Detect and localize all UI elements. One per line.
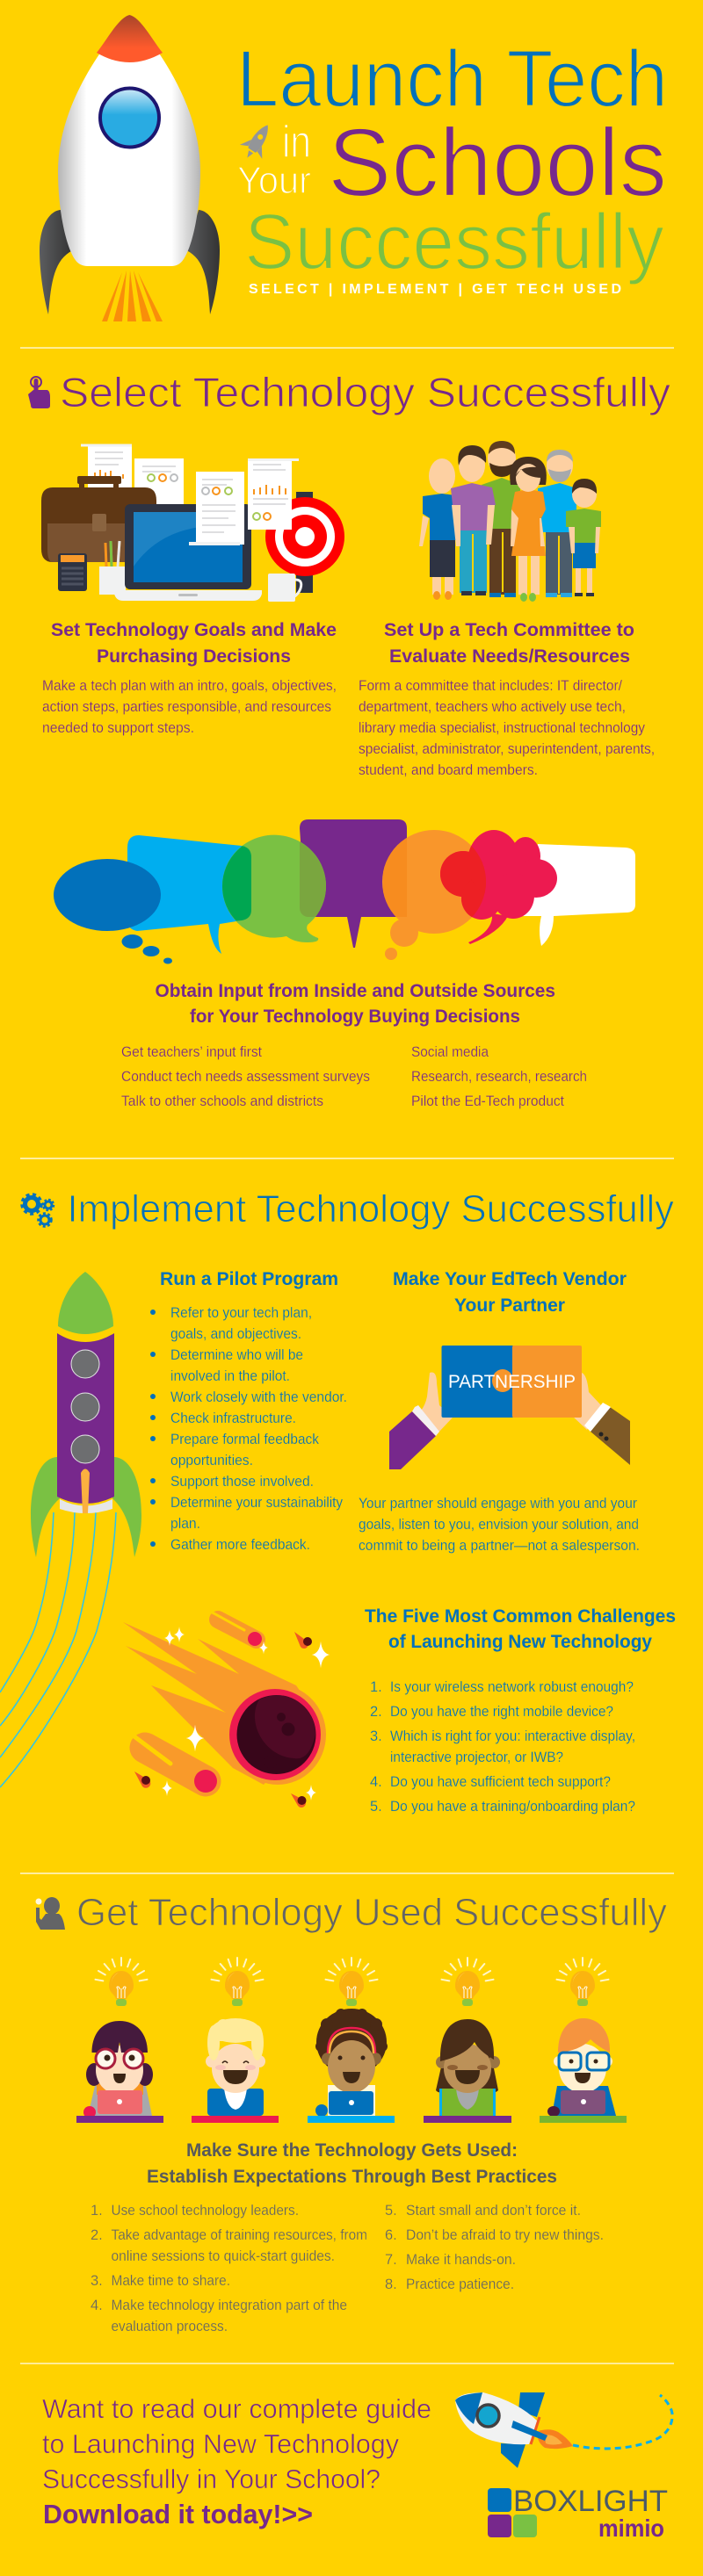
meteor tail [123, 1622, 321, 1785]
heading: of Launching New Technology [388, 1632, 652, 1652]
student 3 [308, 2009, 395, 2123]
logo: boxlight mimio: mimio [598, 2515, 664, 2542]
body text: action steps, parties responsible, and resources [42, 699, 331, 715]
cyan bubble [127, 835, 251, 954]
list [170, 1305, 347, 1553]
paper 3 [189, 472, 244, 545]
person: child, green shirt [566, 479, 601, 596]
numbered list: Which is right for you: interactive display, [390, 1728, 635, 1744]
list: right: Make it hands-on. [406, 2252, 516, 2268]
flame [538, 2429, 573, 2449]
body text: Your partner should engage with you and your [359, 1496, 637, 1512]
heading: Run a Pilot Program [160, 1269, 338, 1289]
calculator [58, 553, 87, 591]
icon: pointing hand [28, 377, 50, 408]
list: left: 1. [91, 2203, 103, 2219]
illustration: small rocket with dashed trail [455, 2392, 672, 2468]
list: right: 6. [385, 2227, 397, 2243]
bulb 1 [95, 1958, 148, 2006]
block: vendor partner [359, 1269, 640, 1554]
list: right column [411, 1044, 587, 1109]
list: left column: Talk to other schools and districts [121, 1093, 323, 1109]
fins [31, 1457, 141, 1557]
list: right: 7. [385, 2252, 397, 2268]
pencil cup [99, 541, 126, 595]
list: goals, and objectives. [170, 1326, 301, 1342]
list: right: Practice patience. [406, 2277, 514, 2292]
section heading: implement: Implement Technology Successfully [67, 1187, 674, 1230]
rocket body [455, 2392, 538, 2444]
list: Support those involved. [170, 1474, 314, 1490]
purple bubble [300, 819, 407, 948]
heading: Make Your EdTech Vendor [393, 1269, 627, 1289]
illustration: pilot rocket with contrails [0, 1272, 141, 1787]
numbered list: interactive projector, or IWB? [390, 1750, 563, 1765]
heading: The Five Most Common Challenges [365, 1606, 676, 1627]
numbered list: 5. [370, 1799, 382, 1815]
illustration: office desk [41, 445, 344, 602]
list: left column [121, 1044, 370, 1109]
body text: department, teachers who actively use tech, [359, 699, 626, 715]
title: Your [237, 159, 311, 202]
person: grey beard man, cyan shirt [538, 450, 576, 597]
nose cone [58, 1272, 113, 1334]
heading [365, 1606, 676, 1652]
person: woman, blue shirt [419, 458, 466, 600]
green bubble [222, 835, 326, 942]
heading: Purchasing Decisions [97, 646, 291, 667]
heading [147, 2140, 557, 2187]
target [265, 497, 344, 576]
illustration: five lightbulbs [95, 1958, 608, 2006]
briefcase [41, 476, 156, 562]
flame stem [81, 1468, 90, 1513]
block: run a pilot [150, 1269, 347, 1553]
list: left: Make time to share. [111, 2273, 230, 2289]
list: right [385, 2203, 604, 2292]
numbered list: Do you have a training/onboarding plan? [390, 1799, 635, 1815]
call to action: Successfully in Your School? [42, 2464, 380, 2494]
block: five challenges [365, 1606, 676, 1815]
student 2 [192, 2018, 279, 2123]
body text [42, 678, 337, 736]
list: right column: Pilot the Ed-Tech product [411, 1093, 564, 1109]
student 1 [76, 2021, 163, 2123]
illustration: five students [76, 2009, 627, 2123]
paper 1 [81, 445, 132, 498]
section heading: get tech used: Get Technology Used Successfully [76, 1891, 667, 1934]
logo: boxlight mimio: BOXLIGHT [513, 2485, 668, 2518]
illustration: partnership hands: PARTNERSHIP [448, 1372, 576, 1392]
fins [501, 2392, 545, 2468]
list: left: 3. [91, 2273, 103, 2289]
title: in [282, 117, 311, 168]
list: left: online sessions to quick-start guides. [111, 2248, 335, 2264]
bulb 3 [325, 1958, 378, 2006]
right sleeve [591, 1407, 630, 1465]
block: tech goals [42, 620, 337, 736]
list: left: Make technology integration part of the [111, 2298, 347, 2313]
list: right column: Research, research, research [411, 1069, 587, 1085]
illustration: tech committee people [419, 441, 601, 602]
heading [384, 620, 634, 667]
numbered list [370, 1679, 635, 1815]
title: SELECT | IMPLEMENT | GET TECH USED [249, 282, 621, 297]
body text: commit to being a partner—not a salesperson. [359, 1538, 640, 1554]
mug [268, 574, 301, 602]
section heading: select: Select Technology Successfully [60, 369, 671, 415]
body text: needed to support steps. [42, 720, 194, 736]
heading: for Your Technology Buying Decisions [190, 1007, 520, 1027]
red cloud bubble [440, 830, 557, 944]
bulb 2 [211, 1958, 264, 2006]
block: tech committee [359, 620, 655, 778]
body text: specialist, administrator, superintendent, parents, [359, 741, 655, 757]
title [236, 34, 668, 297]
icon: gears [22, 1194, 54, 1226]
bullets [150, 1310, 156, 1547]
nozzle [60, 1499, 112, 1513]
title: Schools [328, 109, 667, 217]
paper 4 [248, 458, 299, 530]
person: woman, orange dress [510, 457, 547, 602]
list: Determine who will be [170, 1347, 303, 1363]
heading: Your Partner [454, 1295, 565, 1316]
bulb 5 [557, 1958, 608, 2006]
heading [393, 1269, 627, 1316]
dashed trail [573, 2395, 672, 2449]
call to action: Download it today!>> [43, 2499, 313, 2529]
numbered list: 2. [370, 1704, 382, 1720]
small comet top [206, 1604, 262, 1646]
heading [155, 981, 555, 1027]
illustration: speech bubbles [54, 819, 635, 964]
left sleeve [389, 1411, 436, 1469]
target stand [296, 492, 313, 593]
list: opportunities. [170, 1453, 253, 1468]
sparkles [162, 1627, 330, 1800]
list: Refer to your tech plan, [170, 1305, 312, 1321]
list: left: evaluation process. [111, 2319, 228, 2334]
heading: Establish Expectations Through Best Practices [147, 2167, 557, 2187]
numbered list: Is your wireless network robust enough? [390, 1679, 634, 1695]
body text: goals, listen to you, envision your solution, and [359, 1517, 639, 1533]
numbered list: Do you have sufficient tech support? [390, 1774, 611, 1790]
body text: library media specialist, instructional technology [359, 720, 646, 736]
list: Work closely with the vendor. [170, 1389, 347, 1405]
body text: Make a tech plan with an intro, goals, objectives, [42, 678, 337, 694]
heading: Evaluate Needs/Resources [389, 646, 630, 667]
title: Successfully [244, 198, 664, 286]
windows [71, 1350, 99, 1463]
logo: boxlight mimio [488, 2485, 668, 2542]
orange bubble [382, 830, 472, 960]
student 4 [424, 2019, 511, 2123]
body text: student, and board members. [359, 762, 538, 778]
list: left column: Conduct tech needs assessment surveys [121, 1069, 370, 1085]
list: Check infrastructure. [170, 1411, 296, 1426]
person: man with beard, green shirt [482, 441, 520, 597]
list: left: Use school technology leaders. [111, 2203, 299, 2219]
list: right: 5. [385, 2203, 397, 2219]
list: Gather more feedback. [170, 1537, 310, 1553]
call to action [42, 2393, 431, 2529]
list: Prepare formal feedback [170, 1432, 320, 1447]
heading [51, 620, 337, 667]
illustration: meteor [123, 1604, 330, 1808]
list: plan. [170, 1516, 200, 1532]
body text [359, 1496, 640, 1554]
list: involved in the pilot. [170, 1368, 290, 1384]
list: right column: Social media [411, 1044, 489, 1060]
numbered list: 3. [370, 1728, 382, 1744]
student 5 [540, 2018, 627, 2123]
heading: Obtain Input from Inside and Outside Sources [155, 981, 555, 1001]
meteor head [229, 1685, 326, 1785]
icon: small grey rocket [236, 118, 279, 165]
rocket window [477, 2405, 499, 2427]
body text [359, 678, 655, 778]
list: left: 4. [91, 2298, 103, 2313]
body [57, 1333, 114, 1504]
icon: person with bulb [35, 1897, 65, 1930]
list: right: 8. [385, 2277, 397, 2292]
numbered list: Do you have the right mobile device? [390, 1704, 613, 1720]
list: left [91, 2203, 367, 2334]
white bubble [522, 844, 635, 946]
list: left column: Get teachers’ input first [121, 1044, 262, 1060]
heading: Make Sure the Technology Gets Used: [186, 2140, 518, 2161]
heading: Set Technology Goals and Make [51, 620, 337, 640]
hero rocket illustration [40, 15, 220, 321]
list: Determine your sustainability [170, 1495, 344, 1511]
list: right: Start small and don’t force it. [406, 2203, 581, 2219]
numbered list: 4. [370, 1774, 382, 1790]
list: left: Take advantage of training resources, from [111, 2227, 367, 2243]
contrails [0, 1512, 116, 1787]
block: best practices [91, 2140, 604, 2334]
numbered list: 1. [370, 1679, 382, 1695]
call to action: to Launching New Technology [42, 2428, 399, 2459]
large comet bottom [132, 1735, 217, 1793]
blue thought bubble [54, 859, 172, 964]
person: man, purple shirt [451, 445, 496, 595]
call to action: Want to read our complete guide [42, 2393, 431, 2424]
illustration: partnership hands [389, 1346, 630, 1469]
body text: Form a committee that includes: IT director/ [359, 678, 622, 694]
paper 2 [134, 458, 184, 507]
bulb 4 [441, 1958, 494, 2006]
laptop [114, 504, 262, 601]
block: obtain input [121, 981, 587, 1109]
list: left: 2. [91, 2227, 103, 2243]
small debris [134, 1632, 312, 1808]
heading: Set Up a Tech Committee to [384, 620, 634, 640]
title: Launch Tech [236, 34, 668, 124]
list: right: Don’t be afraid to try new things. [406, 2227, 604, 2243]
